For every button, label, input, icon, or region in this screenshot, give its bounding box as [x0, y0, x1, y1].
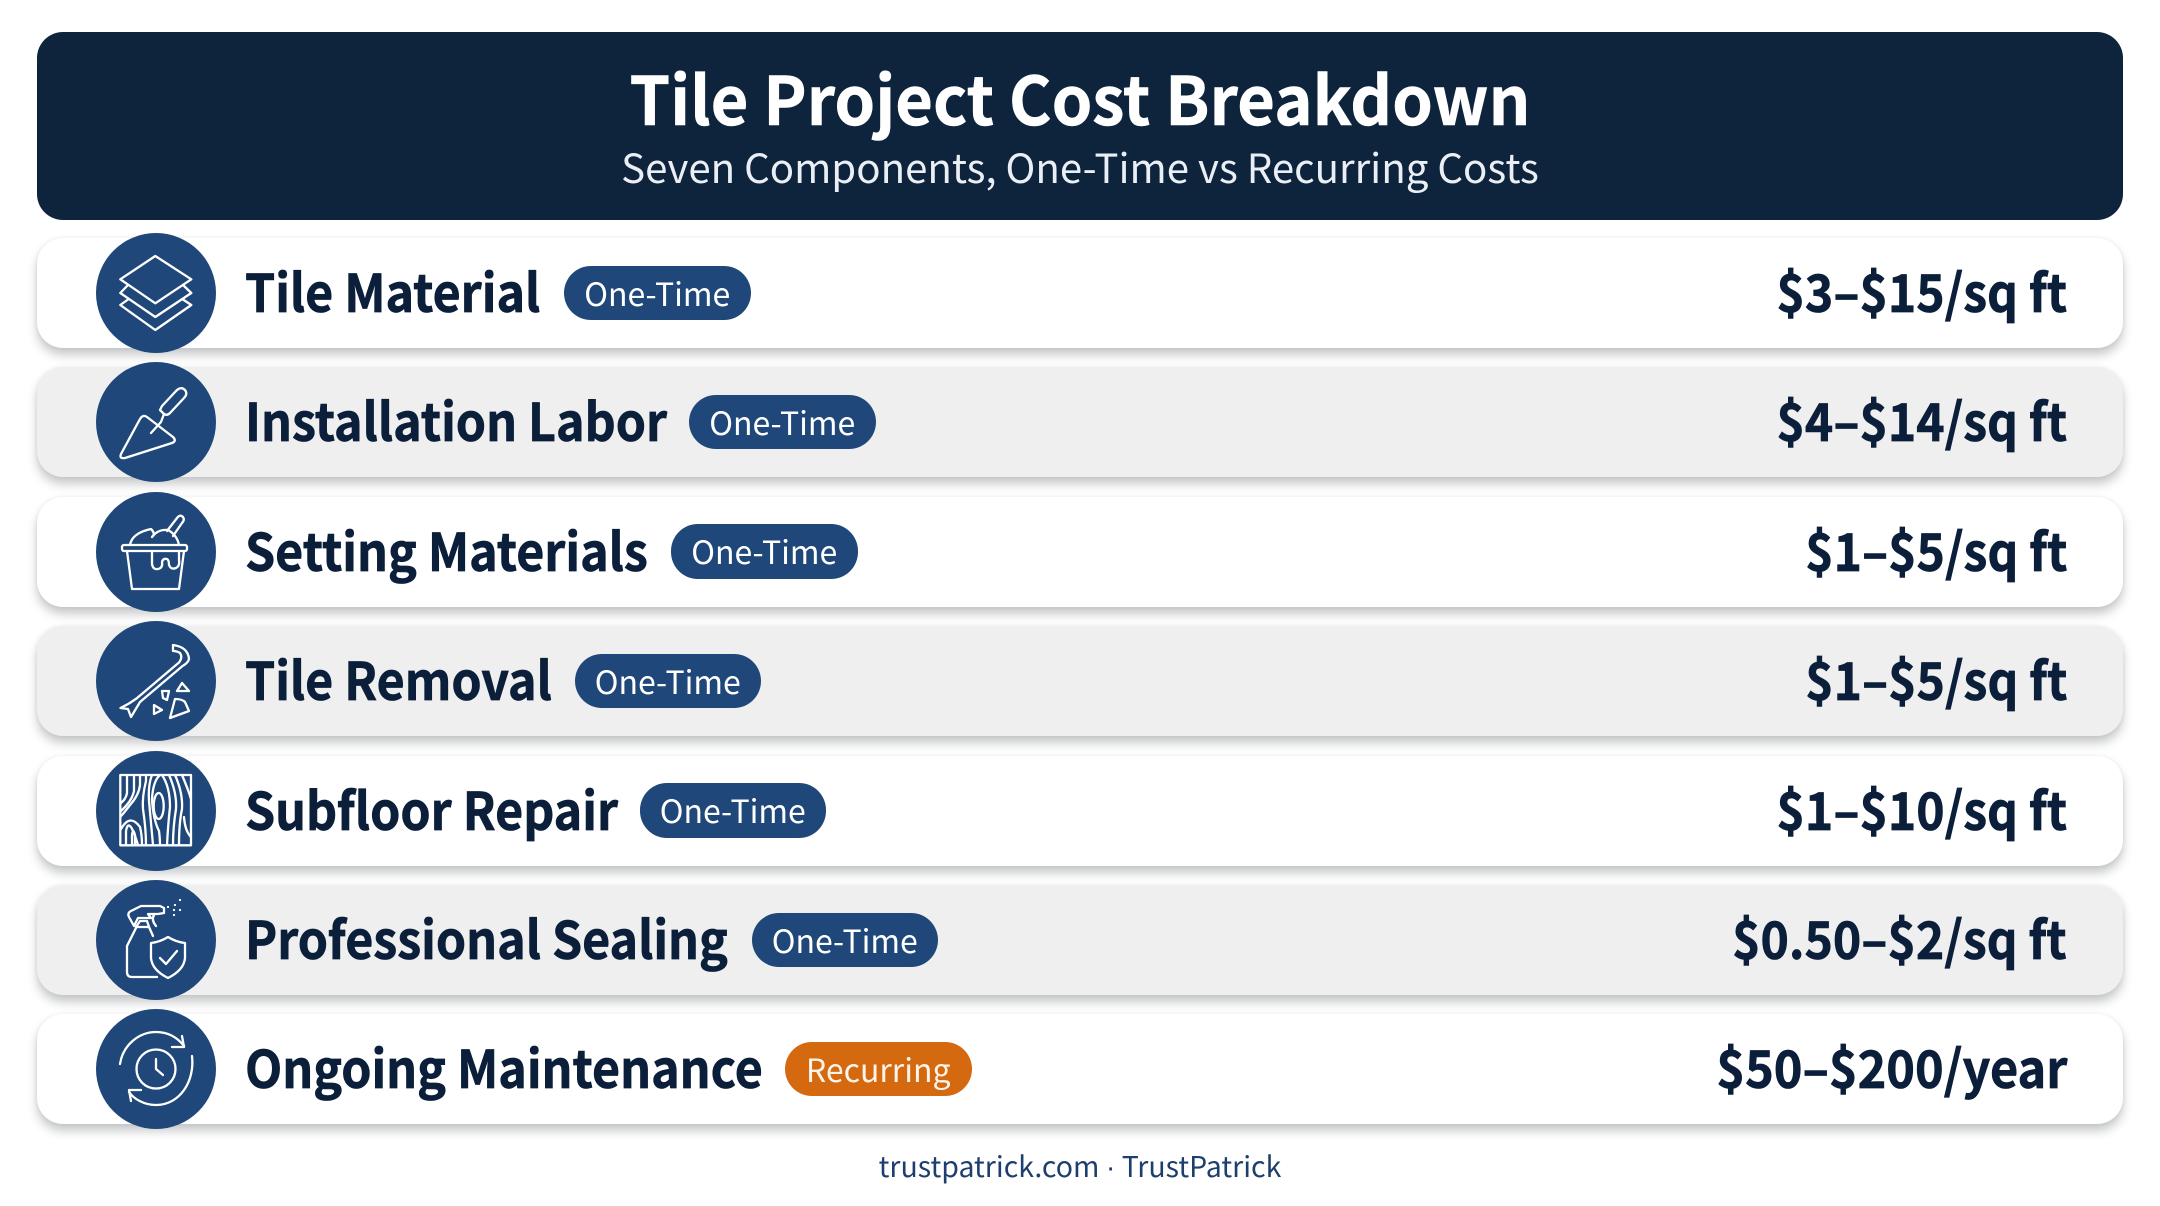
- row: professional sealing: [37, 885, 2123, 995]
- name: Tile Material: [245, 252, 540, 327]
- row: installation labor: [37, 367, 2123, 477]
- badge: [752, 912, 938, 967]
- badge: One-Time: [584, 270, 730, 316]
- row: ongoing maintenance: [37, 1014, 2123, 1124]
- badge: [564, 266, 750, 320]
- name: Installation Labor: [245, 381, 667, 456]
- name: Professional Sealing: [245, 899, 728, 974]
- name: Ongoing Maintenance: [245, 1028, 763, 1103]
- subtitle: Seven Components, One-Time vs Recurring Costs: [621, 136, 1539, 195]
- icon: bucket of mortar: [96, 492, 216, 612]
- icon: trowel: [96, 362, 216, 482]
- title: Tile Project Cost Breakdown: [630, 48, 1530, 145]
- price: $1–$5/sq ft: [1805, 640, 2067, 715]
- badge: One-Time: [772, 916, 918, 962]
- header banner: [37, 32, 2123, 220]
- icon: spray bottle and shield: [96, 880, 216, 1000]
- badge: One-Time: [691, 528, 837, 574]
- name: Subfloor Repair: [245, 770, 618, 845]
- price: $3–$15/sq ft: [1776, 252, 2067, 327]
- icon: stacked tiles: [96, 233, 216, 353]
- footer attribution: trustpatrick.com · TrustPatrick: [879, 1145, 1281, 1186]
- name: Setting Materials: [245, 511, 648, 586]
- price: $50–$200/year: [1716, 1028, 2067, 1103]
- badge: [574, 654, 761, 708]
- badge: Recurring: [806, 1046, 951, 1092]
- row: tile removal: [37, 626, 2123, 736]
- price: $1–$10/sq ft: [1776, 770, 2067, 845]
- name: Tile Removal: [245, 640, 552, 715]
- icon: wood plank: [96, 751, 216, 871]
- row: subfloor repair: [37, 756, 2123, 866]
- price: $4–$14/sq ft: [1776, 381, 2067, 456]
- price: $1–$5/sq ft: [1805, 511, 2067, 586]
- badge: [785, 1042, 972, 1096]
- row: setting materials: [37, 497, 2123, 607]
- badge: [671, 524, 858, 579]
- badge: [640, 783, 826, 838]
- icon: clock with cycle arrows: [96, 1009, 216, 1129]
- badge: One-Time: [660, 787, 806, 833]
- badge: One-Time: [595, 658, 741, 704]
- badge: [689, 395, 876, 449]
- badge: One-Time: [709, 399, 855, 445]
- price: $0.50–$2/sq ft: [1732, 899, 2067, 974]
- row: tile material: [37, 238, 2123, 348]
- icon: crowbar and tile shards: [96, 621, 216, 741]
